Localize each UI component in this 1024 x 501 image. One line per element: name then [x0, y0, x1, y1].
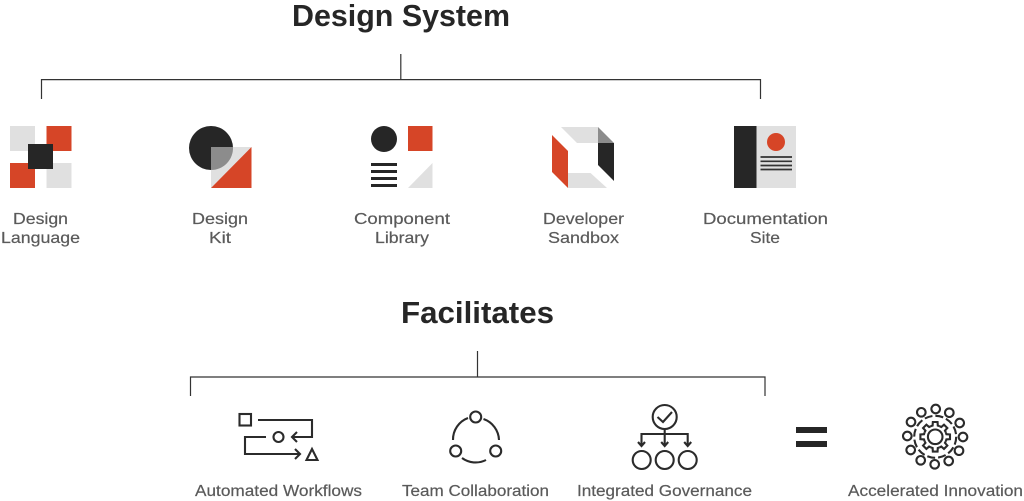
label: Automated Workflows: Automated Workflows	[195, 483, 362, 500]
label: Team Collaboration: Team Collaboration	[402, 483, 549, 500]
bracket: design system	[42, 54, 760, 99]
label: Design Kit: Design	[192, 211, 248, 228]
label: Accelerated Innovation: Accelerated Innovation	[848, 483, 1023, 500]
label: Component Library: Component	[354, 211, 451, 228]
label: Documentation Site: Documentation	[703, 211, 828, 228]
label: Developer Sandbox: Sandbox	[548, 230, 619, 247]
icon: component library shapes	[371, 126, 432, 188]
icon: documentation page	[734, 126, 796, 188]
panel: Integrated Governance	[577, 405, 752, 500]
icon: gear with orbiting circles	[903, 405, 967, 469]
heading: Facilitates: Facilitates	[401, 295, 554, 330]
icon: design language squares	[10, 126, 72, 188]
label: Design Language: Design	[13, 211, 68, 228]
panel: Documentation Site	[703, 126, 828, 247]
icon: governance hierarchy	[633, 405, 697, 469]
label: Design Kit: Kit	[209, 230, 232, 247]
panel: Developer Sandbox	[543, 127, 625, 247]
bracket: facilitates	[190, 351, 765, 396]
label: Documentation Site: Site	[750, 230, 780, 247]
panel: Component Library	[354, 126, 451, 247]
panel: Design Language	[1, 126, 80, 247]
label: Design Language: Language	[1, 230, 80, 247]
panel: Design Kit	[189, 126, 252, 247]
icon: design kit circle and triangles	[189, 126, 252, 188]
label: Component Library: Library	[375, 230, 429, 247]
label: Developer Sandbox: Developer	[543, 211, 625, 228]
panel: Accelerated Innovation	[848, 405, 1023, 500]
icon: team cycle	[450, 412, 501, 462]
icon: developer sandbox frame	[552, 127, 614, 188]
icon: equals sign	[796, 427, 827, 447]
panel: Automated Workflows	[195, 414, 362, 500]
label: Integrated Governance: Integrated Governance	[577, 483, 752, 500]
panel: Team Collaboration	[402, 412, 549, 500]
icon: workflow arrows	[240, 414, 318, 460]
